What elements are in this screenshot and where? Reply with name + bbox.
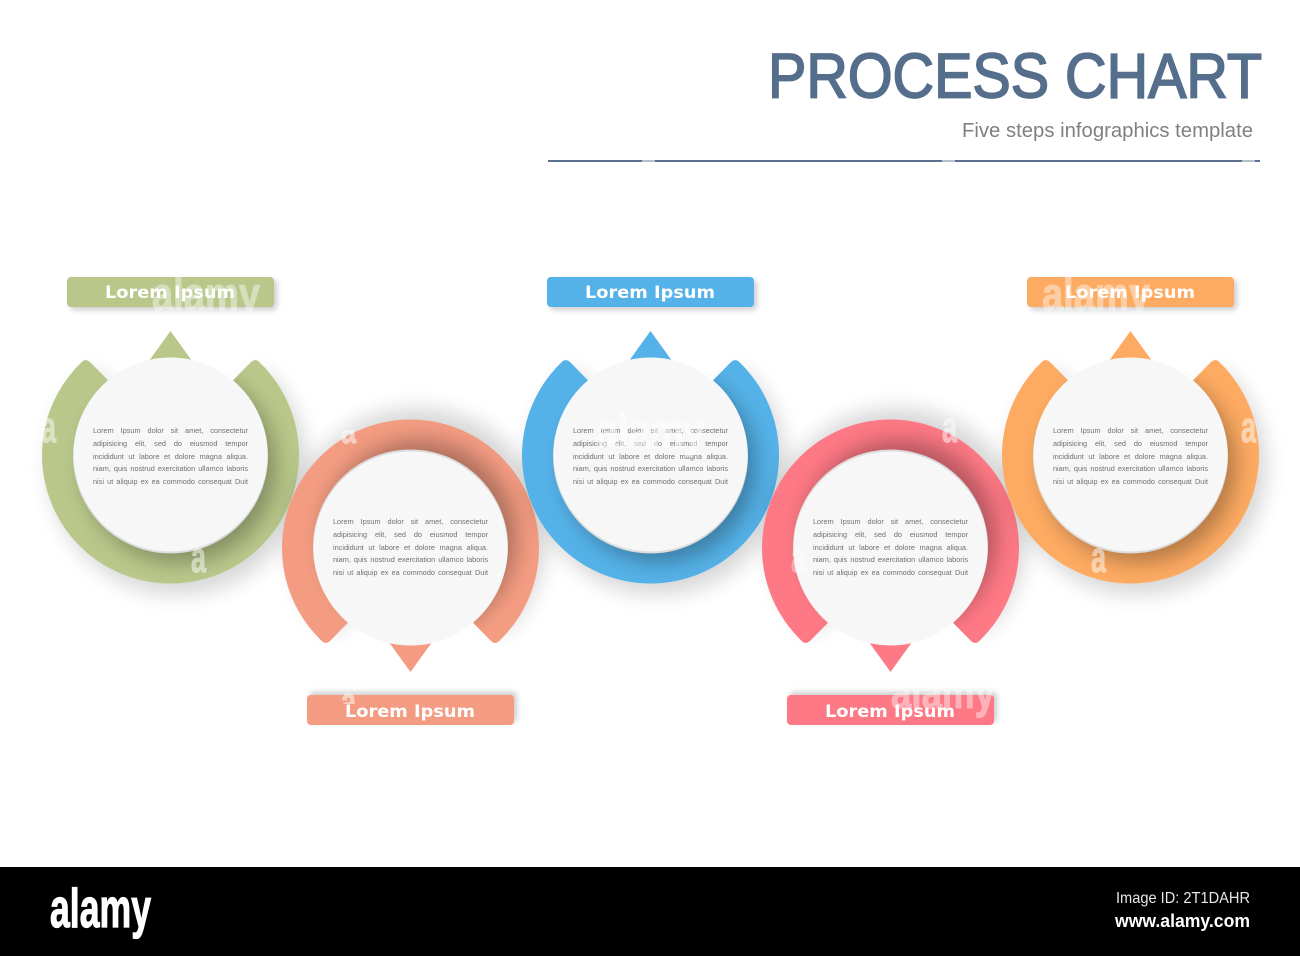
text block: step 5: Lorem Ipsum dolor sit amet, consectetur xyxy=(1053,426,1208,435)
text block: step 3: nisi ut aliquip ex ea commodo consequat Duit xyxy=(573,477,728,486)
text block: step 2: incididunt ut labore et dolore magna aliqua. xyxy=(333,542,488,552)
ring: step 1 xyxy=(42,331,306,595)
text block: step 2 xyxy=(333,517,488,577)
text block: step 2: Lorem Ipsum dolor sit amet, consectetur xyxy=(333,517,488,526)
panel: step 2 salmon xyxy=(281,400,554,725)
label: step 2 xyxy=(307,692,517,725)
text block: step 1: Lorem Ipsum dolor sit amet, consectetur xyxy=(93,426,248,435)
text block: step 4: adipisicing elit, sed do eiusmod tempor xyxy=(813,530,968,539)
ring: step 4 xyxy=(762,408,1026,672)
text block: step 3: Lorem Ipsum dolor sit amet, consectetur xyxy=(573,426,728,435)
text block: step 1: adipisicing elit, sed do eiusmod tempor xyxy=(93,439,248,448)
ring: step 5 xyxy=(1002,331,1266,595)
text block: step 1 xyxy=(93,426,248,486)
panel: step 3 blue xyxy=(521,277,794,602)
text block: step 4: niam, quis nostrud exercitation ullamco laboris xyxy=(813,555,968,564)
label: step 5: Lorem Ipsum xyxy=(1065,283,1195,303)
footer url: www.alamy.com xyxy=(1114,911,1250,931)
text block: step 2: adipisicing elit, sed do eiusmod tempor xyxy=(333,530,488,539)
watermark overlay: alamy xyxy=(152,268,260,320)
watermark overlay: a xyxy=(41,403,56,452)
ring: step 3 xyxy=(522,331,786,595)
watermark overlay: a xyxy=(191,533,206,582)
text block: step 2: niam, quis nostrud exercitation ullamco laboris xyxy=(333,555,488,564)
image id: Image ID: 2T1DAHR xyxy=(1116,890,1250,907)
footer bar xyxy=(0,867,1300,956)
text block: step 5: incididunt ut labore et dolore magna aliqua. xyxy=(1053,452,1208,460)
panel: step 4 red xyxy=(761,400,1034,725)
text block: step 5: nisi ut aliquip ex ea commodo consequat Duit xyxy=(1053,477,1208,486)
watermark overlay: alamy xyxy=(597,405,705,457)
watermark overlay xyxy=(42,277,1256,718)
label: step 1 xyxy=(67,277,277,310)
label: step 3: Lorem Ipsum xyxy=(585,283,715,303)
text block: step 5 xyxy=(1053,426,1208,486)
label: step 3 xyxy=(547,277,757,310)
label: step 5 xyxy=(1027,277,1237,310)
watermark overlay: a xyxy=(1091,533,1106,582)
label: step 2: Lorem Ipsum xyxy=(345,702,475,722)
text block: step 3: niam, quis nostrud exercitation ullamco laboris xyxy=(573,464,728,473)
text block: step 1: nisi ut aliquip ex ea commodo consequat Duit xyxy=(93,477,248,486)
panel: step 5 orange xyxy=(1001,277,1274,602)
watermark overlay: a xyxy=(341,404,356,453)
text block: step 1: niam, quis nostrud exercitation ullamco laboris xyxy=(93,464,248,473)
text block: step 3: incididunt ut labore et dolore magna aliqua. xyxy=(573,452,728,460)
label: step 1: Lorem Ipsum xyxy=(105,283,235,303)
ring: step 2 xyxy=(282,408,546,672)
footer logo: alamy xyxy=(50,877,151,939)
label: step 4 xyxy=(787,692,997,725)
subtitle: Five steps infographics template xyxy=(962,120,1253,142)
text block: step 4: Lorem Ipsum dolor sit amet, consectetur xyxy=(813,517,968,526)
label: step 4: Lorem Ipsum xyxy=(825,702,955,722)
watermark overlay: a xyxy=(942,403,957,452)
text block: step 4: nisi ut aliquip ex ea commodo consequat Duit xyxy=(813,568,968,577)
text block: step 5: adipisicing elit, sed do eiusmod tempor xyxy=(1053,439,1208,448)
watermark overlay: alamy xyxy=(891,666,995,718)
text block: step 4: incididunt ut labore et dolore magna aliqua. xyxy=(813,542,968,552)
watermark overlay: a xyxy=(341,680,357,724)
watermark overlay: alamy xyxy=(1042,268,1150,320)
text block: step 1: incididunt ut labore et dolore magna aliqua. xyxy=(93,452,248,460)
watermark overlay: a xyxy=(791,533,806,582)
text block: step 5: niam, quis nostrud exercitation ullamco laboris xyxy=(1053,464,1208,473)
panel: step 1 green xyxy=(41,277,314,602)
text block: step 4 xyxy=(813,517,968,577)
text block: step 3 xyxy=(573,426,728,486)
watermark overlay: a xyxy=(1241,403,1256,452)
text block: step 3: adipisicing elit, sed do eiusmod tempor xyxy=(573,439,728,448)
text block: step 2: nisi ut aliquip ex ea commodo consequat Duit xyxy=(333,568,488,577)
